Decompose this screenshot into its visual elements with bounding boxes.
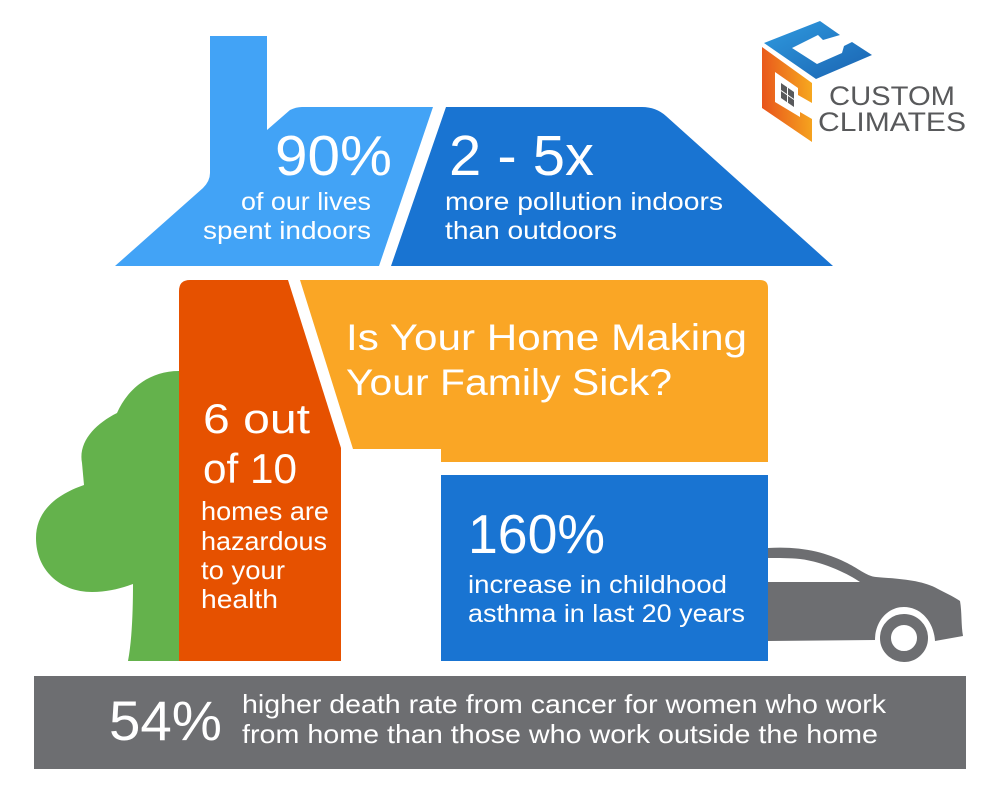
logo wordmark: CLIMATES bbox=[818, 107, 966, 137]
stat: 6 out of 10: of 10 bbox=[203, 445, 297, 492]
stat: 90%: 90% bbox=[275, 124, 392, 188]
text: homes are hazardous to your health: homes are bbox=[201, 496, 329, 526]
title bbox=[346, 317, 747, 403]
panel: gray ground bar, 54% bbox=[34, 676, 966, 769]
text: increase in childhood asthma bbox=[468, 571, 745, 628]
icon: orange C bbox=[762, 47, 812, 142]
icon: blue C bbox=[764, 21, 872, 79]
text: more pollution indoors than outdoors: than outdoors bbox=[445, 217, 617, 245]
logo: Custom Climates bbox=[762, 21, 966, 142]
text: higher death rate bbox=[242, 689, 887, 749]
text: homes are hazardous to your health: to your bbox=[201, 555, 285, 585]
stat: 54%: 54% bbox=[109, 689, 222, 752]
text: increase in childhood asthma: increase in childhood bbox=[468, 571, 727, 599]
text: higher death rate: from home than those who work outside the home bbox=[242, 719, 878, 749]
text: homes are hazardous to your health bbox=[201, 496, 329, 614]
panel: roof left, 90% bbox=[115, 36, 433, 266]
text: more pollution indoors than outdoors: more pollution indoors bbox=[445, 188, 723, 216]
text: homes are hazardous to your health: hazardous bbox=[201, 526, 327, 556]
panel: roof right, 2-5x bbox=[391, 107, 833, 266]
title: Your Family Sick? bbox=[346, 362, 672, 403]
panel: blue box, 160% bbox=[441, 475, 768, 661]
text: of our lives spent indoors: of our lives bbox=[241, 188, 371, 216]
stat: 6 out of 10: 6 out bbox=[203, 395, 310, 442]
text: homes are hazardous to your health: health bbox=[201, 584, 278, 614]
stat: 160%: 160% bbox=[468, 503, 605, 565]
logo wordmark: CUSTOM bbox=[829, 81, 955, 111]
icon: tree bbox=[36, 371, 179, 661]
icon: car bbox=[768, 548, 963, 656]
text: higher death rate: higher death rate from cancer for women who work bbox=[242, 689, 887, 719]
stat: 6 out of 10 bbox=[203, 395, 310, 492]
title: Is Your Home Making bbox=[346, 317, 747, 358]
icon: window bbox=[781, 83, 794, 107]
text: more pollution indoors than outdoors bbox=[445, 188, 723, 245]
text: increase in childhood asthma: asthma in last 20 years bbox=[468, 600, 745, 628]
panel: yellow title block bbox=[300, 280, 768, 462]
text: of our lives spent indoors bbox=[203, 188, 371, 245]
stat: 2 - 5x: 2 - 5x bbox=[449, 124, 594, 188]
logo wordmark bbox=[818, 81, 966, 137]
text: of our lives spent indoors: spent indoors bbox=[203, 217, 371, 245]
panel: orange wall, 6 out of 10 bbox=[179, 280, 341, 661]
